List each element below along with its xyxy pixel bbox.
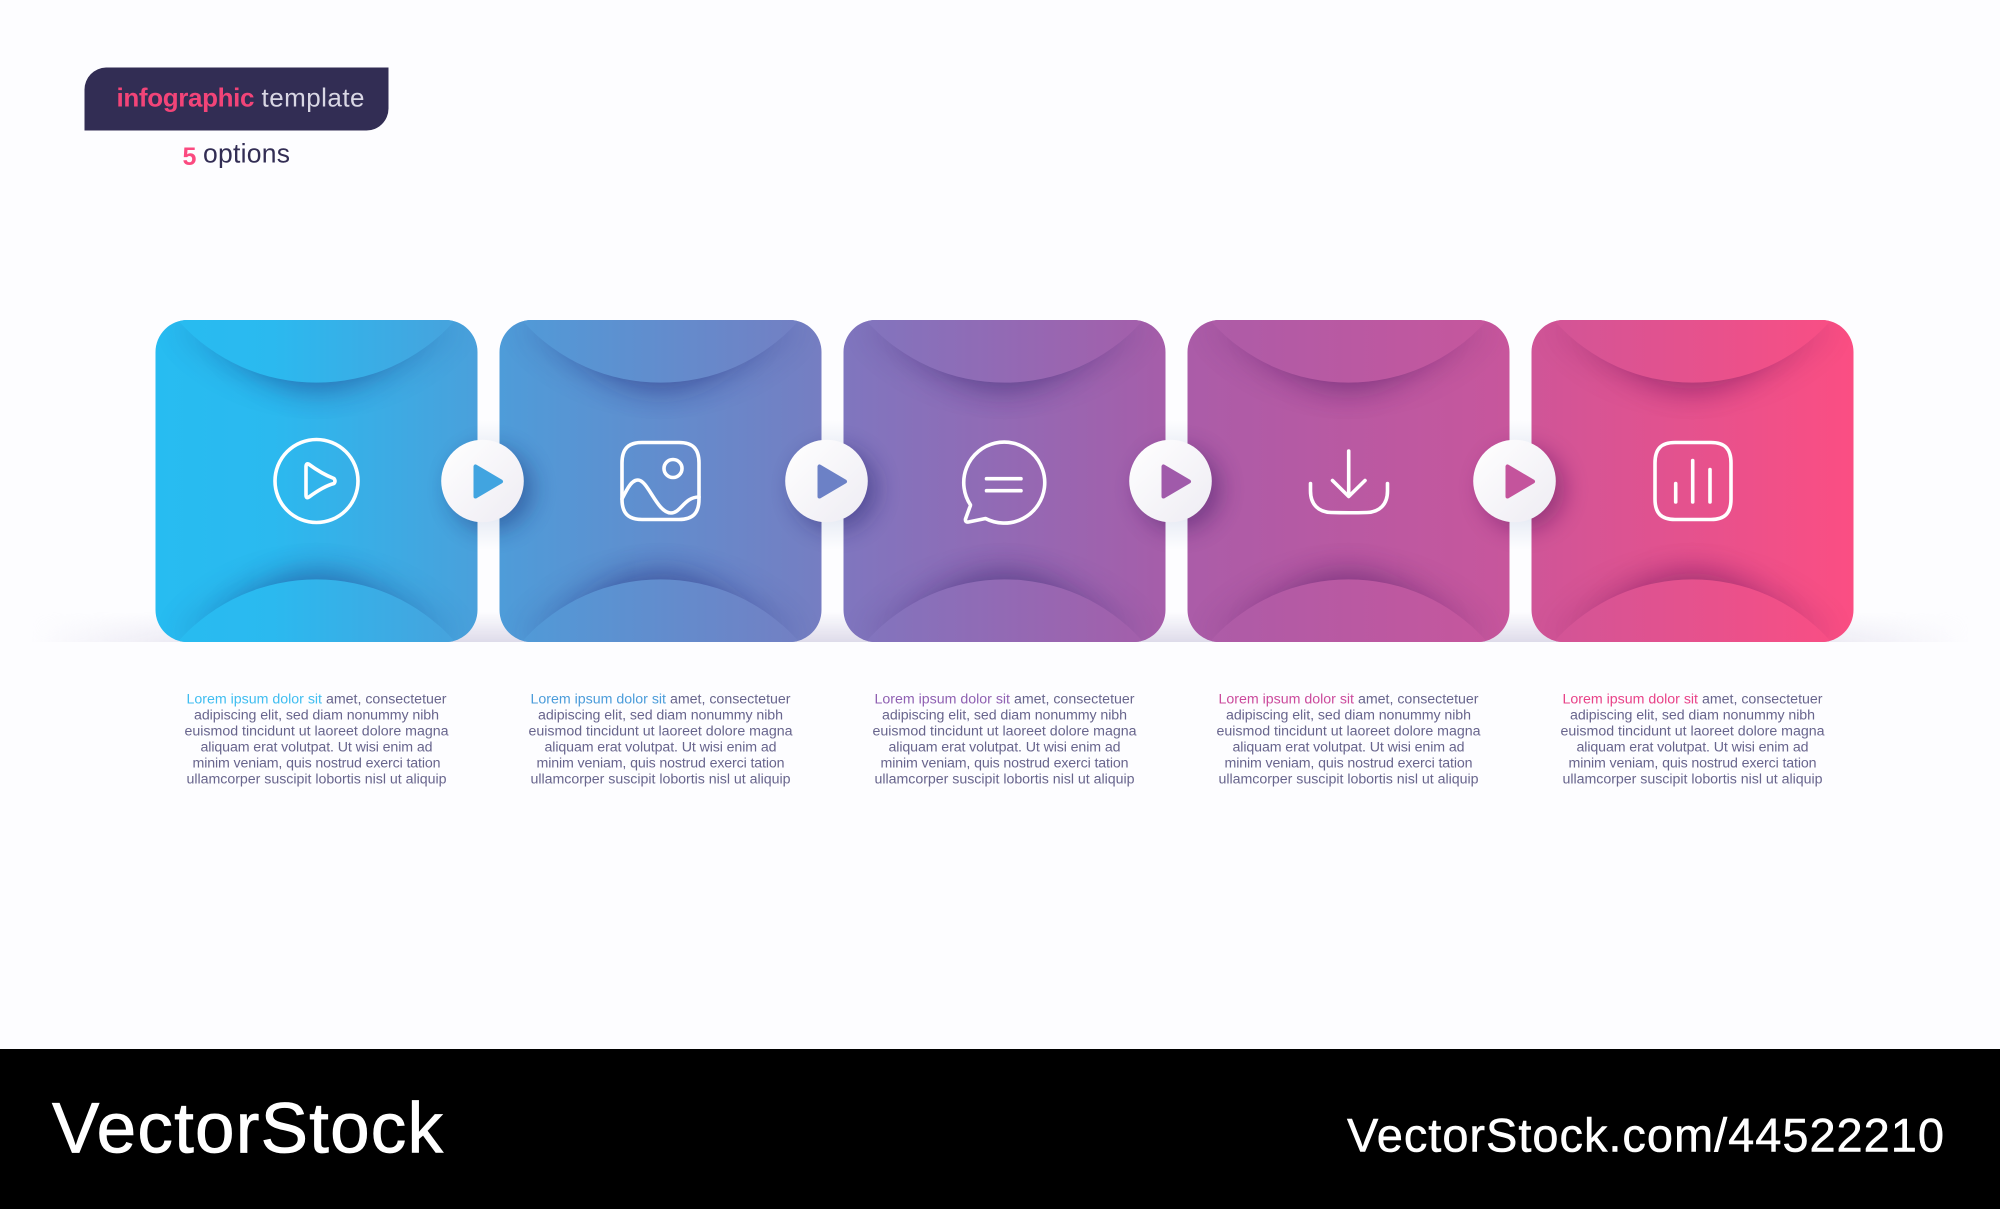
text block: step 3: euismod tincidunt ut laoreet dolore magna	[872, 724, 1137, 740]
text block: step 1: ullamcorper suscipit lobortis nisl ut aliquip	[186, 772, 447, 788]
title badge: infographic	[116, 82, 254, 112]
arrow: step 1 to 2	[441, 440, 532, 530]
panel: step 3 card	[844, 320, 1166, 642]
text block: step 2: adipiscing elit, sed diam nonummy nibh	[538, 708, 783, 724]
text block: step 1: adipiscing elit, sed diam nonummy nibh	[194, 708, 439, 724]
text block: step 4: ullamcorper suscipit lobortis nisl ut aliquip	[1218, 772, 1479, 788]
text block: step 5	[1560, 692, 1825, 788]
text block: step 5: adipiscing elit, sed diam nonummy nibh	[1570, 708, 1815, 724]
panel: step 5 card	[1532, 320, 1854, 642]
icon: image	[622, 442, 699, 520]
icon: chat bubble	[964, 442, 1045, 523]
top lens	[1212, 320, 1486, 383]
bottom lens	[524, 579, 798, 642]
text block: step 5: ullamcorper suscipit lobortis nisl ut aliquip	[1562, 772, 1823, 788]
arrow: step 3 to 4	[1129, 440, 1220, 530]
text block: step 1: aliquam erat volutpat. Ut wisi enim ad	[200, 740, 432, 756]
text block: step 5: aliquam erat volutpat. Ut wisi enim ad	[1576, 740, 1808, 756]
footer image id: VectorStock.com/44522210	[1347, 1108, 1944, 1162]
top lens	[1556, 320, 1830, 383]
text block: step 1	[184, 692, 449, 788]
text block: step 3: Lorem ipsum dolor sit amet, consectetuer	[874, 692, 1135, 708]
icon: download	[1310, 451, 1388, 513]
text block: step 4: euismod tincidunt ut laoreet dolore magna	[1216, 724, 1481, 740]
bottom lens	[1212, 579, 1486, 642]
floor shadow	[89, 619, 1910, 642]
arrow: step 4 to 5	[1473, 440, 1564, 530]
text block: step 3	[872, 692, 1137, 788]
panel: step 2 card	[500, 320, 822, 642]
text block: step 1: euismod tincidunt ut laoreet dolore magna	[184, 724, 449, 740]
text block: step 3: ullamcorper suscipit lobortis nisl ut aliquip	[874, 772, 1135, 788]
bottom lens	[1556, 579, 1830, 642]
text block: step 2: minim veniam, quis nostrud exerci tation	[536, 756, 784, 772]
arrow: step 2 to 3	[785, 440, 876, 530]
bottom lens	[868, 579, 1142, 642]
bottom lens	[180, 579, 454, 642]
text block: step 1: minim veniam, quis nostrud exerci tation	[192, 756, 440, 772]
subtitle: 5 options: 5	[182, 143, 196, 171]
text block: step 3: adipiscing elit, sed diam nonummy nibh	[882, 708, 1127, 724]
top lens	[524, 320, 798, 383]
text block: step 2	[528, 692, 793, 788]
connector gaps shading	[478, 420, 1532, 550]
text block: step 5: Lorem ipsum dolor sit amet, consectetuer	[1562, 692, 1823, 708]
panel: step 1 card	[156, 320, 478, 642]
text block: step 4: minim veniam, quis nostrud exerci tation	[1224, 756, 1472, 772]
text block: step 4: adipiscing elit, sed diam nonummy nibh	[1226, 708, 1471, 724]
icon: play circle	[275, 440, 358, 522]
footer bar	[0, 1049, 2000, 1209]
text block: step 4	[1216, 692, 1481, 788]
text block: step 3: minim veniam, quis nostrud exerci tation	[880, 756, 1128, 772]
panel: step 4 card	[1188, 320, 1510, 642]
footer brand: VectorStock	[52, 1090, 444, 1168]
text block: step 2: ullamcorper suscipit lobortis nisl ut aliquip	[530, 772, 791, 788]
top lens	[868, 320, 1142, 383]
text block: step 5: minim veniam, quis nostrud exerci tation	[1568, 756, 1816, 772]
text block: step 2: euismod tincidunt ut laoreet dolore magna	[528, 724, 793, 740]
text block: step 1: Lorem ipsum dolor sit amet, consectetuer	[186, 692, 447, 708]
text block: step 4: Lorem ipsum dolor sit amet, consectetuer	[1218, 692, 1479, 708]
title badge	[84, 68, 389, 130]
text block: step 2: aliquam erat volutpat. Ut wisi enim ad	[544, 740, 776, 756]
text block: step 5: euismod tincidunt ut laoreet dolore magna	[1560, 724, 1825, 740]
top lens	[180, 320, 454, 383]
icon: bar chart	[1655, 442, 1731, 520]
title badge: template	[262, 82, 364, 112]
text block: step 2: Lorem ipsum dolor sit amet, consectetuer	[530, 692, 791, 708]
text block: step 4: aliquam erat volutpat. Ut wisi enim ad	[1232, 740, 1464, 756]
text block: step 3: aliquam erat volutpat. Ut wisi enim ad	[888, 740, 1120, 756]
subtitle: 5 options: options	[203, 138, 290, 168]
